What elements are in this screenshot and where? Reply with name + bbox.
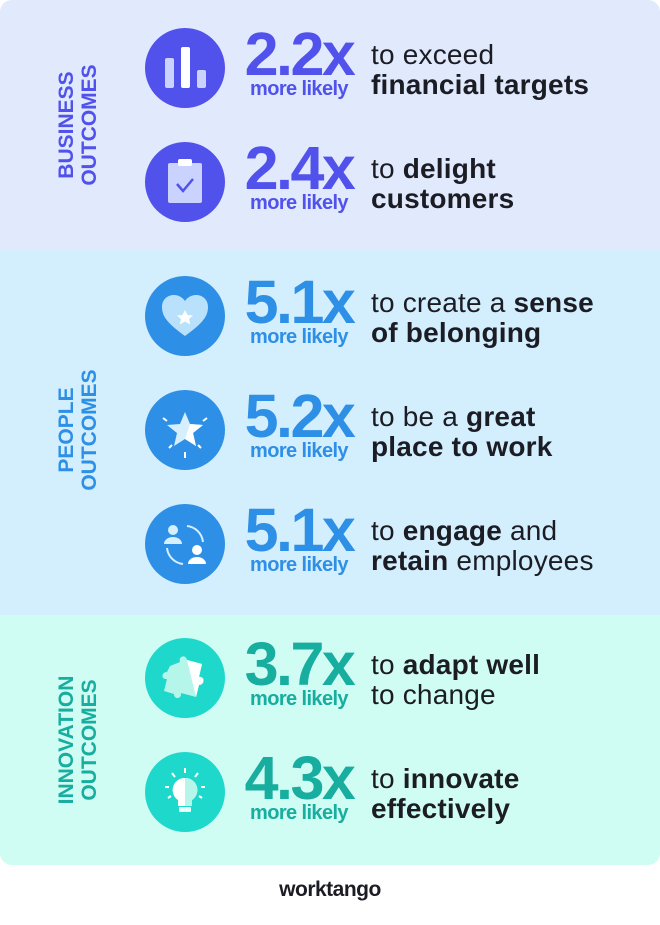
row: 5.1x belonging (145, 268, 594, 356)
row: 5.1x engage (145, 496, 594, 584)
heading: innovation outcomes (55, 676, 101, 804)
row: 3.7x: more likely (250, 688, 348, 710)
heading: people outcomes (55, 369, 101, 491)
panel: business outcomes (0, 0, 660, 250)
icon: bar chart (145, 28, 225, 108)
heading: people outcomes: OUTCOMES (78, 369, 101, 491)
panel: people outcomes (0, 250, 660, 615)
row: 4.3x (145, 744, 519, 832)
row: 2.2x: to exceed (371, 39, 494, 70)
icon: lightbulb (145, 752, 225, 832)
row: 4.3x: more likely (250, 802, 348, 824)
row: 3.7x: to change (371, 679, 496, 710)
heading: business outcomes: OUTCOMES (78, 64, 101, 186)
row: 2.4x: to delight (371, 153, 496, 184)
row: 2.2x (145, 20, 589, 108)
row: 5.1x belonging: 5.1x (245, 268, 353, 336)
row: 2.4x: 2.4x (245, 134, 353, 202)
row: 5.1x belonging: of belonging (371, 317, 541, 348)
row: 5.1x engage: retain employees (371, 545, 594, 576)
row: 2.2x: 2.2x (245, 20, 353, 88)
row: 3.7x: to adapt well (371, 649, 540, 680)
row: 5.2x: place to work (371, 431, 553, 462)
row: 5.1x engage: to engage and (371, 515, 557, 546)
row: 2.4x: customers (371, 183, 514, 214)
row: 3.7x: 3.7x (245, 630, 353, 698)
icon: people cycle (145, 504, 225, 584)
row: 4.3x: 4.3x (245, 744, 353, 812)
icon: puzzle (145, 638, 225, 718)
row: 5.1x belonging: to create a sense (371, 287, 594, 318)
icon: clipboard (145, 142, 225, 222)
logo: worktango: worktango (279, 878, 381, 901)
row: 2.2x: financial targets (371, 69, 589, 100)
row: 2.4x (145, 134, 514, 222)
panel: innovation outcomes (0, 615, 660, 865)
row: 4.3x: to innovate (371, 763, 519, 794)
heading: business outcomes (55, 64, 101, 186)
heading: innovation outcomes: OUTCOMES (78, 679, 101, 801)
row: 5.2x: to be a great (371, 401, 535, 432)
row: 5.2x (145, 382, 553, 470)
row: 4.3x: effectively (371, 793, 510, 824)
row: 5.1x engage: 5.1x (245, 496, 353, 564)
heading: people outcomes: PEOPLE (55, 387, 78, 473)
icon: heart (145, 276, 225, 356)
row: 5.1x belonging: more likely (250, 326, 348, 348)
row: 5.1x engage: more likely (250, 554, 348, 576)
row: 3.7x (145, 630, 540, 718)
heading: innovation outcomes: INNOVATION (55, 676, 78, 804)
row: 5.2x: more likely (250, 440, 348, 462)
icon: star (145, 390, 225, 470)
row: 2.4x: more likely (250, 192, 348, 214)
row: 2.2x: more likely (250, 78, 348, 100)
heading: business outcomes: BUSINESS (55, 71, 78, 179)
row: 5.2x: 5.2x (245, 382, 353, 450)
